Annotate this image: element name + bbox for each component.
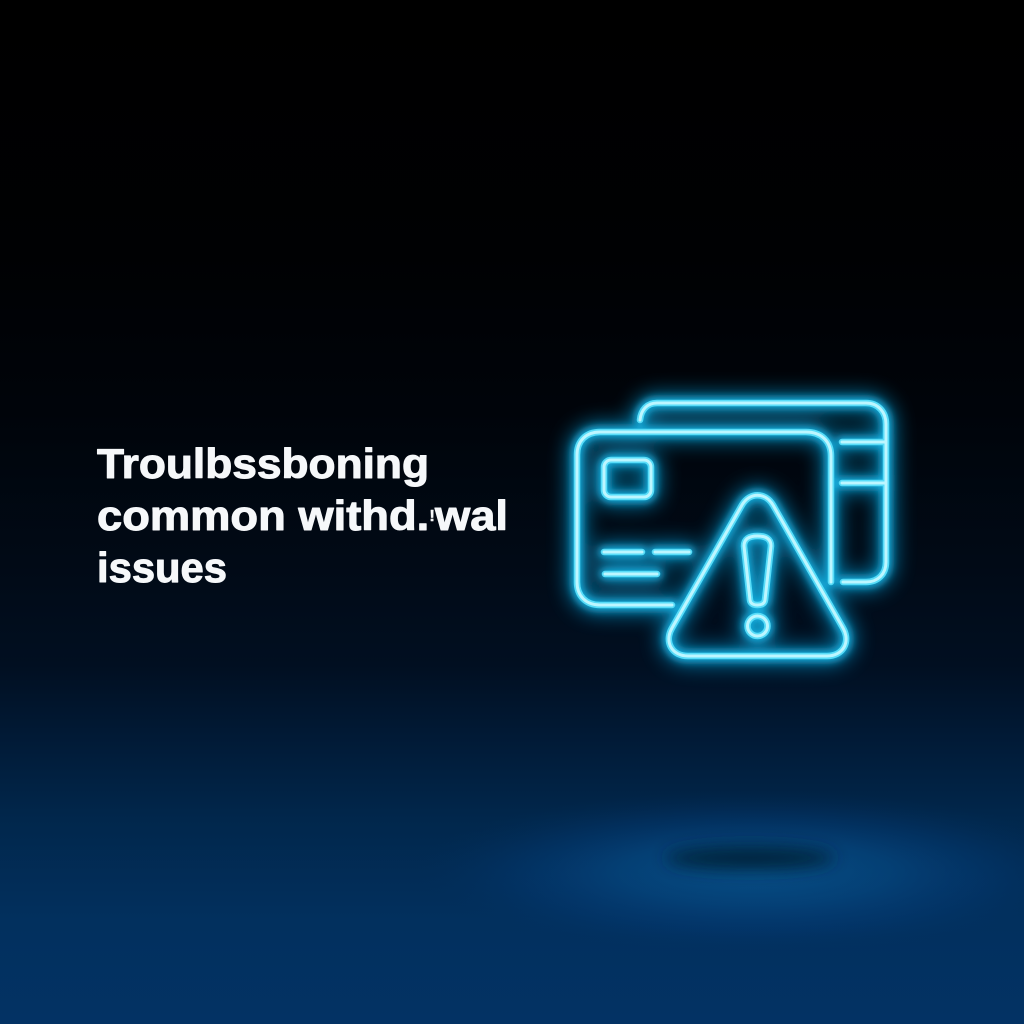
title line 3: issues <box>97 544 227 591</box>
title line 2: ! <box>429 508 435 525</box>
title line 2: wal <box>434 492 508 539</box>
title <box>97 440 508 591</box>
icon: neon credit cards with warning triangle <box>577 403 886 656</box>
title line 1: Troulbssboning <box>97 440 429 487</box>
floor glow <box>415 790 1024 954</box>
title line 2: common withd. <box>97 492 405 539</box>
floating icon shadow <box>666 846 834 870</box>
